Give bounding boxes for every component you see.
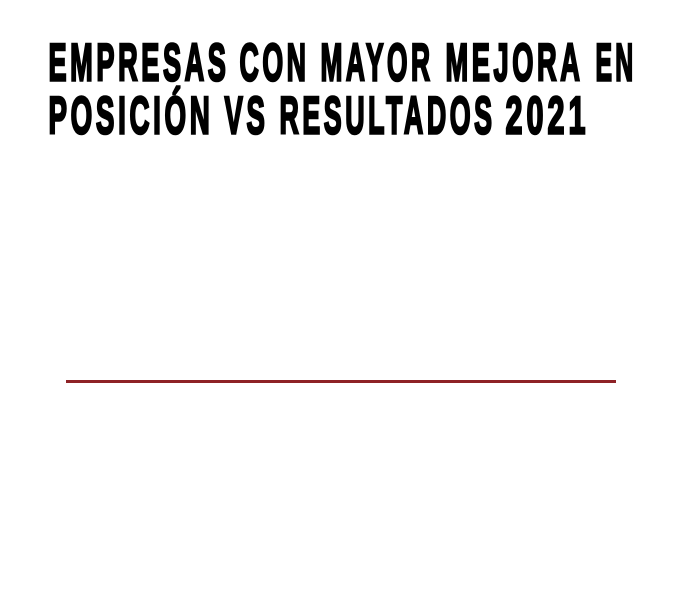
title: VS: [224, 86, 268, 146]
title: 2021: [506, 86, 590, 146]
text: EN: [596, 34, 636, 92]
title: [48, 34, 636, 146]
title: EMPRESAS: [48, 34, 230, 92]
title: CON: [240, 34, 310, 92]
title: MAYOR: [320, 34, 434, 92]
red divider line: [66, 380, 616, 383]
title: POSICIÓN: [48, 86, 214, 146]
